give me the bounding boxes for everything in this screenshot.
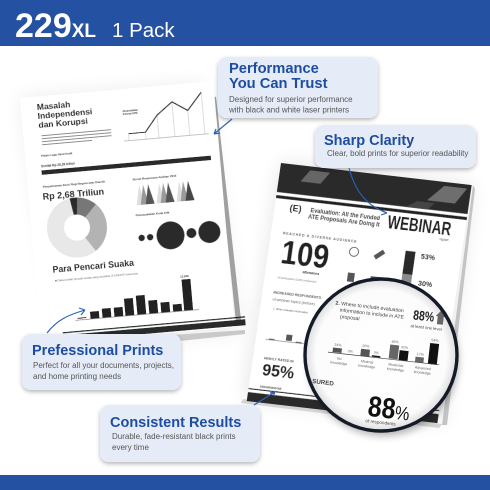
header pack count: 1 Pack xyxy=(112,19,175,42)
callout: professional prints: Prefessional Prints xyxy=(32,343,163,359)
chart caption: ■ Data jumlah pencari suaka yang terdaftar di UNHCR Indonesia xyxy=(55,271,138,283)
lens bar chart: 20% xyxy=(362,344,370,349)
bubble chart xyxy=(135,206,222,252)
lens bar chart: knowledge xyxy=(413,370,431,376)
callout: performance: You Can Trust xyxy=(229,76,328,92)
magnifier xyxy=(305,279,458,436)
arrow: performance xyxy=(214,119,232,134)
document: left page: dan Korupsi xyxy=(38,116,88,130)
line chart xyxy=(120,92,209,141)
lens 88% small: 88% xyxy=(412,307,435,325)
document: right page: ATE Proposals Are Doing It xyxy=(308,214,380,229)
callout: performance xyxy=(218,57,378,118)
95 percent: 95% xyxy=(261,361,295,383)
line chart: Kinerja KPK xyxy=(123,111,138,116)
lens bar chart: 3% xyxy=(373,351,380,355)
callout: sharp clarity: Clear, bold prints for superior readability xyxy=(327,149,468,158)
document: left page: Independensi xyxy=(37,106,93,121)
lens bar chart: knowledge xyxy=(330,360,348,366)
lens bar chart: 17% xyxy=(417,352,425,357)
triangle charts: Survei Responsen Auditan 2016 xyxy=(132,174,177,181)
lens bar chart: No xyxy=(337,357,342,361)
callout: sharp clarity: Sharp Clarity xyxy=(324,133,414,149)
109 attendees: All participants (100%) responded xyxy=(277,276,317,284)
lens caption small: at least one level xyxy=(410,323,442,332)
lens caption: of respondents xyxy=(365,418,397,427)
bar chart: 13.840 xyxy=(180,274,189,279)
heading: kerugian negara: Penyelisaman Kasti Rugi Negara atau Daerah xyxy=(43,179,105,189)
callout: professional prints: Perfect for all your documents, projects, xyxy=(33,361,174,370)
lens arrow up xyxy=(435,310,446,325)
callout: performance: Designed for superior performance xyxy=(229,95,353,104)
callout: consistent results: Durable, fade-resistant black prints xyxy=(112,432,236,441)
callout: performance: with black and white laser printers xyxy=(228,106,349,114)
bubble chart: Permasalahan Kode Etik xyxy=(135,210,170,217)
document: left page xyxy=(20,80,246,346)
109 attendees: 109 xyxy=(279,234,332,276)
magnifier: information to include in ATE xyxy=(339,308,405,321)
triangle charts xyxy=(132,172,195,205)
heading: diverse audience: REACHED A DIVERSE AUDIENCE xyxy=(283,231,357,244)
line chart: Akumulatian xyxy=(122,108,139,113)
percentage bar xyxy=(401,250,437,289)
percentage bar: 53% xyxy=(420,252,436,262)
lens bar chart: 3% xyxy=(347,349,354,354)
header bar xyxy=(0,0,490,46)
intro text lines xyxy=(41,129,112,145)
heading: increased respondents: of webinar topics (before) xyxy=(272,297,316,306)
callout: consistent results: Consistent Results xyxy=(110,415,241,431)
lens heading: 2. Where to include evaluation xyxy=(335,301,404,314)
section heading: para pencari suaka: Para Pencari Suaka xyxy=(52,258,134,275)
lens bar chart: 54% xyxy=(431,338,440,343)
lens bar chart: Minimal xyxy=(361,359,374,365)
callout: consistent results: every time xyxy=(112,443,149,452)
page title: Masalah xyxy=(36,99,71,112)
footer bar xyxy=(0,475,490,490)
percentage bar: 30% xyxy=(418,279,433,289)
lens bar chart: 32% xyxy=(401,345,409,350)
black data band xyxy=(40,139,211,175)
lens bar chart: Moderate xyxy=(388,362,404,368)
lens 88% large: 88% xyxy=(366,391,412,428)
logo E: (E) xyxy=(289,203,302,214)
donut chart xyxy=(54,204,100,251)
lens bar chart: 46% xyxy=(391,340,400,344)
lens bar chart: Advanced xyxy=(415,365,431,371)
black data band: Senilai Rp 28,28 triliun xyxy=(41,161,75,168)
lens bar chart: knowledge xyxy=(387,367,404,373)
webinar word: WEBINAR xyxy=(386,212,453,239)
callout: consistent results xyxy=(100,405,260,462)
heading: increased respondents: INCREASED RESPONDENTS xyxy=(273,290,322,300)
webinar title: Evaluation: All the Funded xyxy=(310,208,381,222)
bottom black band xyxy=(63,316,246,341)
heading: increased respondents: 1. What evaluation information xyxy=(273,307,309,315)
callout: sharp clarity xyxy=(315,125,476,168)
lens section word: SURED xyxy=(312,378,335,388)
big figure: Rp 2,68 Triliun xyxy=(42,187,104,202)
dark page header xyxy=(276,163,472,220)
bar chart xyxy=(72,273,199,321)
heading: highly rated: HIGHLY RATED IN xyxy=(264,356,294,364)
recommend text: recommend xyxy=(260,384,282,391)
document: right page xyxy=(241,163,475,428)
lens bar chart xyxy=(327,327,442,377)
109 attendees: attendees xyxy=(302,270,320,276)
header title: 229XL xyxy=(15,7,96,45)
magnifier: proposal xyxy=(340,314,360,322)
callout: professional prints: and home printing needs xyxy=(33,372,121,381)
report label: report xyxy=(439,237,449,242)
audience icons xyxy=(345,246,386,285)
bottom bands xyxy=(247,388,439,423)
heading: increased respondents xyxy=(271,290,322,316)
arrow: sharp clarity xyxy=(349,168,387,215)
lens bar chart: 14% xyxy=(334,343,342,348)
black data band: Pidato Lagu Hasil Audit xyxy=(41,151,73,158)
arrow: consistent results xyxy=(254,392,275,405)
lens bar chart: knowledge xyxy=(358,363,375,369)
small bars xyxy=(266,332,312,345)
callout: performance: Performance xyxy=(229,61,319,77)
callout: professional prints xyxy=(22,334,181,390)
arrow: professional prints xyxy=(47,308,85,333)
